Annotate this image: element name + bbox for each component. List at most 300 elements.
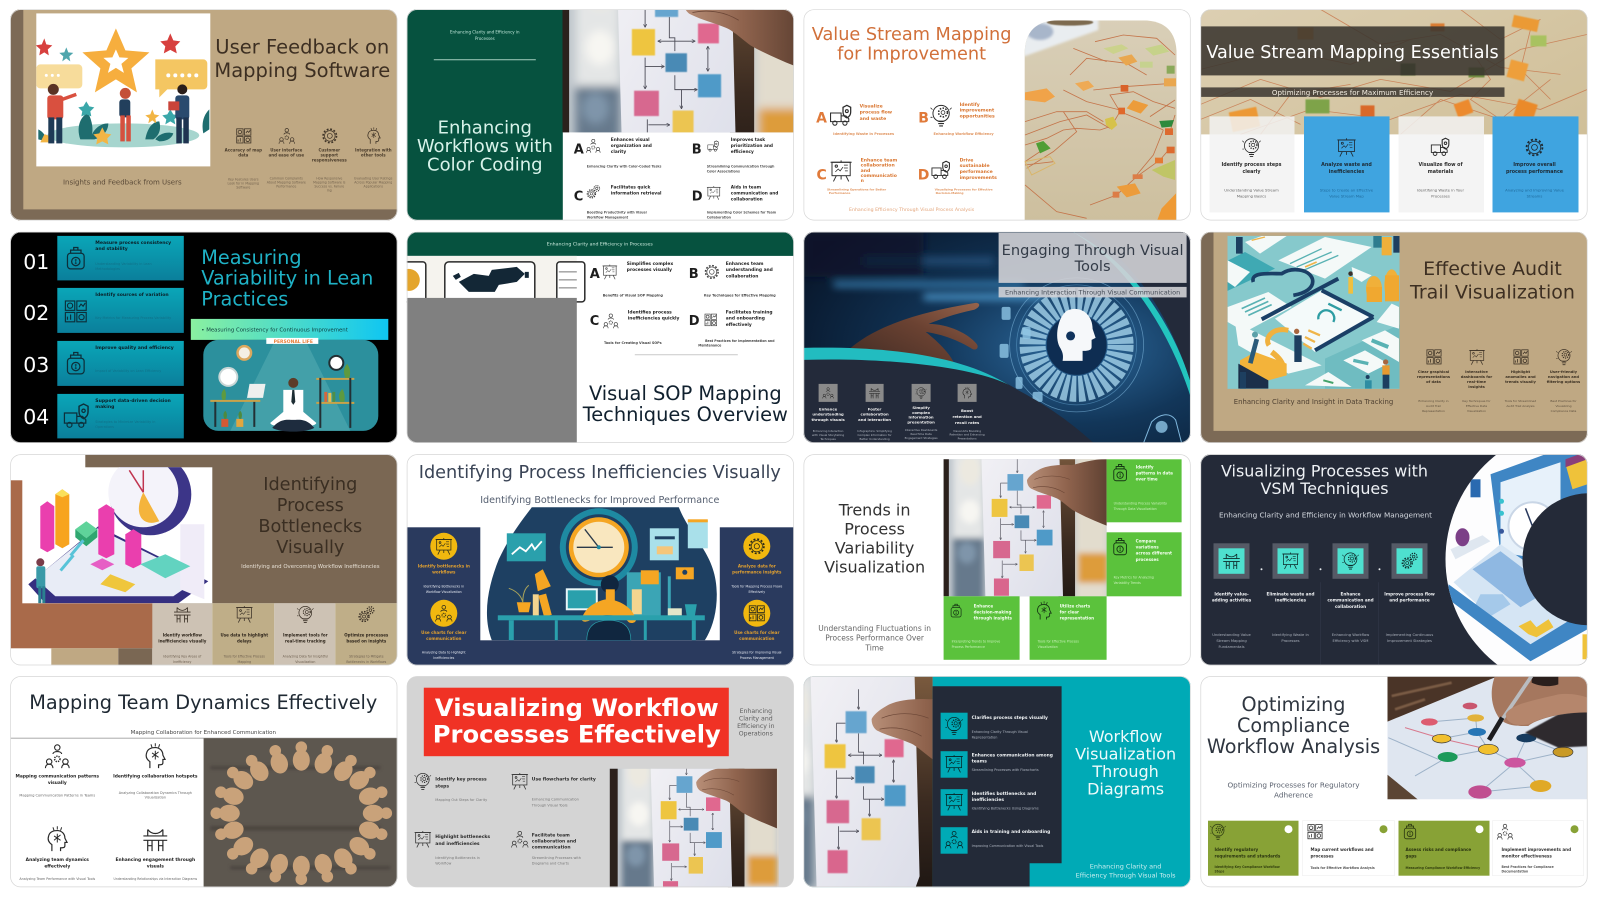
card 1	[1210, 116, 1294, 212]
item: team dynamics: Analyzing team dynamics	[26, 857, 89, 863]
title: Mapping Software	[214, 59, 390, 82]
item 3: Identifying Bottlenecks in	[435, 856, 480, 860]
subtitle: Understanding Fluctuations in	[818, 624, 931, 633]
column labels: Customer	[318, 147, 340, 152]
card 3: Identifying Waste in Your	[1417, 187, 1464, 192]
item A: Enhances visual	[611, 137, 650, 143]
item B: B	[692, 142, 702, 157]
item: team dynamics: Analyzing Team Performance with Visual Tools	[19, 877, 96, 881]
icon: cog	[1527, 139, 1542, 155]
card 1: clearly	[1242, 169, 1261, 175]
feature 3: Interactive Dashboards	[905, 428, 938, 432]
column labels: responsiveness	[312, 157, 347, 162]
title: Compliance	[1237, 714, 1350, 737]
item C: and	[861, 168, 870, 174]
item C: Tools for Creating Visual SOPs	[604, 341, 662, 345]
step card 4: Strategies to Minimize Variability in	[95, 420, 155, 424]
icon	[146, 743, 165, 768]
feature 4: Boost	[961, 408, 973, 413]
item C: Streamlining Operations for Better	[827, 187, 887, 191]
item 2: Enhancing Communication	[532, 798, 579, 802]
title: Techniques Overview	[582, 403, 788, 426]
column labels: Integration with	[355, 147, 392, 152]
list item 1: Enhancing Clarity Through Visual	[972, 730, 1028, 734]
title: Diagrams	[1087, 780, 1164, 799]
item C: Enhance team	[861, 157, 897, 163]
panel: Value Stream Mapping Essentials	[1200, 9, 1588, 220]
icon	[1223, 554, 1240, 569]
item C: C	[590, 314, 599, 329]
item 1: steps	[435, 784, 449, 790]
column labels: and ease of use	[269, 152, 304, 157]
panel: Mapping Team Dynamics Effectively	[10, 676, 398, 887]
step numbers: 04	[23, 405, 49, 429]
item: communication patterns: Mapping Communication Patterns in Teams	[19, 794, 95, 798]
item: analyze data: Tools for Mapping Process Flows	[730, 584, 783, 588]
title: Workflow Analysis	[1207, 735, 1380, 758]
item 1: Mapping Out Steps for Clarity	[435, 798, 487, 802]
item 4: collaboration and	[532, 839, 576, 845]
photo: wooden pegs in a circle	[204, 738, 398, 887]
list item 3: Identifying Bottlenecks Using Diagrams	[972, 807, 1039, 811]
icon	[1308, 825, 1322, 839]
column labels: Interactive	[1465, 370, 1488, 374]
column labels: trends visually	[1505, 380, 1536, 384]
column labels: navigation and	[1548, 375, 1579, 379]
item: analyze data	[730, 533, 783, 594]
subtitle: Optimizing Processes for Regulatory	[1227, 781, 1360, 790]
column descriptions: Compliance Data	[1551, 409, 1577, 413]
item 2	[512, 773, 596, 807]
list item 4	[941, 827, 1050, 854]
feature 1: through visuals	[811, 417, 845, 422]
column descriptions: Applications	[364, 184, 383, 188]
step numbers: 01	[23, 250, 49, 274]
list item 4: Aids in training and onboarding	[972, 829, 1050, 835]
card 4: Improve overall	[1513, 162, 1556, 168]
header band: Enhancing Clarity and Efficiency in Processes	[547, 241, 653, 247]
green card B: variations	[1136, 544, 1159, 549]
green card D: for clear	[1060, 609, 1079, 614]
item A: Benefits of Visual SOP Mapping	[603, 293, 663, 297]
title box: Tools	[1074, 258, 1111, 275]
item D	[689, 309, 775, 347]
card 3: Assess risks and compliance	[1406, 847, 1471, 852]
step card 3: Improve quality and efficiency	[95, 345, 174, 351]
item B: Key Techniques for Effective Mapping	[704, 293, 776, 297]
icon	[1282, 553, 1299, 569]
side caption: Clarity and	[739, 716, 773, 723]
column 3: Implement tools for	[283, 632, 328, 637]
column labels: Clear graphical	[1418, 370, 1449, 374]
icon: integration	[368, 127, 380, 144]
item 1: Identify key process	[435, 777, 487, 783]
column descriptions	[228, 176, 393, 192]
step 1	[1212, 543, 1252, 649]
column labels: real-time	[1467, 380, 1486, 384]
column 2: Tools for Effective Process	[223, 654, 265, 658]
column descriptions: How Responsive	[316, 176, 342, 180]
card 1: Mapping Basics	[1237, 193, 1266, 198]
item: use charts left: Inefficiencies	[433, 656, 455, 660]
photo: map header	[1200, 10, 1588, 134]
item 3: Highlight bottlenecks	[435, 834, 490, 840]
icon	[945, 755, 963, 772]
icon	[143, 829, 167, 851]
card 4: Streams	[1527, 193, 1542, 198]
item: engagement	[113, 829, 197, 881]
item A: clarity	[611, 149, 626, 155]
icon	[945, 831, 963, 848]
column 4	[335, 603, 397, 665]
title: for Improvement	[837, 44, 986, 64]
panel: Value Stream Mapping for Improvement	[804, 9, 1191, 222]
item: identify bottlenecks	[418, 533, 470, 594]
column 2	[212, 603, 274, 665]
step card 4	[57, 394, 184, 438]
supertitle: Enhancing Clarity and Efficiency in	[450, 29, 520, 34]
panel: Visualizing Workflow Processes Effectively	[407, 676, 794, 900]
item B: Enhances team	[726, 261, 764, 267]
subtitle band: Optimizing Processes for Maximum Efficiency	[1272, 88, 1433, 97]
item: identify bottlenecks: Workflow Visualization	[426, 590, 462, 594]
column labels: insights	[1468, 385, 1486, 389]
item B: B	[918, 110, 929, 126]
item: use charts right: Use charts for clear	[734, 630, 779, 635]
item: identify bottlenecks: workflows	[432, 569, 456, 574]
list item 2: Streamlining Processes with Flowcharts	[972, 768, 1039, 772]
card 4: monitor effectiveness	[1502, 854, 1552, 859]
item A: processes visually	[627, 267, 672, 273]
step 2: inefficiencies	[1275, 598, 1306, 603]
icon	[415, 831, 431, 847]
panel: Engaging Through Visual Tools	[804, 232, 1191, 443]
title: Workflows with	[417, 136, 553, 157]
item: use charts left	[421, 600, 466, 660]
header band	[407, 232, 794, 256]
item: team dynamics: effectively	[44, 864, 70, 870]
item A: A	[574, 142, 584, 157]
illustration: meditating professional: PERSONAL LIFE	[274, 339, 313, 345]
column 4: based on insights	[346, 639, 387, 644]
column descriptions: Audit Trail	[1426, 404, 1441, 408]
item 4: communication	[532, 844, 571, 850]
card 1: Steps	[1214, 870, 1225, 874]
item: engagement: Enhancing engagement through	[115, 857, 195, 863]
subtitle: Time	[864, 643, 884, 652]
item: analyze data: performance insights	[732, 569, 782, 574]
supertitle: Processes	[475, 36, 495, 41]
title box: Engaging Through Visual	[1002, 242, 1184, 259]
item D	[692, 184, 778, 219]
item D: Visualizing Processes for Effective	[935, 187, 993, 191]
column labels: anomalies and	[1505, 375, 1536, 379]
title: Visually	[276, 538, 344, 558]
left side panel	[407, 527, 480, 665]
title: Enhancing	[438, 117, 532, 138]
item: collaboration hotspots: Visualization	[145, 796, 166, 800]
column 1: inefficiencies visually	[158, 639, 207, 644]
subtitle: Process Performance Over	[825, 634, 925, 643]
title: Value Stream Mapping	[812, 25, 1011, 45]
lower wave with teal edge	[804, 348, 1094, 443]
subtitle: Enhancing Clarity and	[1090, 863, 1161, 871]
icon	[1114, 538, 1126, 555]
green card B: processes	[1136, 557, 1159, 562]
green card C: Process Performance	[952, 645, 985, 649]
item 3: Workflow	[435, 862, 452, 866]
item 4: Facilitate team	[532, 833, 570, 839]
item A	[590, 261, 673, 297]
feature 4: retention and	[952, 414, 982, 419]
item D: Decision-Making	[936, 191, 964, 195]
item: use charts right: Process Management	[740, 656, 775, 660]
item D: communication and	[731, 190, 778, 196]
photo: flowchart on paper	[944, 459, 1107, 596]
step card 2: Identify sources of variation	[95, 292, 169, 298]
card 2	[1302, 821, 1394, 876]
icon	[945, 717, 963, 734]
item: engagement: visuals	[147, 864, 164, 870]
step card 1	[57, 236, 184, 280]
item D: Collaboration	[707, 215, 732, 219]
subtitle band: • Measuring Consistency for Continuous Improvement	[201, 327, 348, 333]
column descriptions: Visualizing	[1555, 404, 1572, 408]
icon	[48, 826, 67, 851]
item A: A	[816, 110, 827, 126]
column 1	[152, 603, 212, 665]
item B: Streamlining Communication through	[707, 164, 775, 168]
step 3: communication and	[1327, 598, 1374, 603]
list item 3: Identifies bottlenecks and	[972, 791, 1036, 797]
step numbers	[23, 250, 49, 429]
subtitle: Mapping Collaboration for Enhanced Communication	[131, 730, 276, 736]
column 3: Analyzing Data for Insightful	[283, 654, 328, 658]
item B: Color Associations	[707, 169, 740, 173]
feature 2: Infographics: Simplifying	[857, 429, 892, 433]
item 4: Diagrams and Charts	[532, 862, 569, 866]
green card D: Utilize charts	[1060, 603, 1091, 608]
item D: Aids in team	[731, 184, 762, 190]
title: Color Coding	[427, 154, 543, 175]
feature 1: with Visual Storytelling	[812, 433, 844, 437]
item D: performance	[960, 169, 993, 175]
green card A: Through Data Visualization	[1113, 507, 1157, 511]
column descriptions: Common Complaints	[270, 176, 303, 180]
column descriptions: Best Practices for	[1550, 399, 1577, 403]
feature 2	[857, 384, 892, 441]
illustration: laptop and clock in circle	[1446, 426, 1600, 692]
panel: Identifying Process Bottlenecks Visually	[10, 453, 397, 665]
feature 4	[949, 384, 985, 440]
column 2: Mapping	[237, 660, 251, 664]
feature 2: Foster	[868, 406, 882, 411]
column descriptions: Enhancing Clarity in	[1418, 399, 1449, 403]
item C: information retrieval	[611, 190, 662, 196]
icon: truck	[64, 404, 88, 427]
card 3: materials	[1428, 169, 1453, 175]
subtitle band	[191, 319, 388, 340]
column descriptions: Across Popular Mapping	[354, 180, 392, 184]
feature 1	[811, 384, 845, 441]
step 1: Identify value-	[1214, 591, 1249, 596]
item A: Simplifies complex	[627, 261, 673, 267]
card 2: Analyze waste and	[1321, 162, 1372, 168]
grey placeholder block	[407, 298, 577, 443]
card 4: Documentation	[1502, 870, 1528, 874]
icon	[963, 387, 972, 398]
title: Identifying Process Inefficiencies Visually	[419, 463, 781, 483]
list item 2: Enhances communication among	[972, 753, 1053, 759]
item C: Facilitates quick	[611, 184, 650, 190]
icon	[415, 773, 431, 789]
item D: D	[692, 189, 703, 204]
column descriptions: Success vs. Failure	[314, 184, 344, 188]
step 1: Stream Mapping	[1216, 639, 1247, 643]
card 3: gaps	[1406, 854, 1417, 859]
icon	[45, 745, 69, 768]
icon: grid jar	[65, 301, 86, 322]
card 3	[1398, 821, 1490, 876]
subtitle box: Enhancing Interaction Through Visual Communication	[1005, 289, 1180, 297]
feature 3	[905, 384, 938, 440]
step 2: Eliminate waste and	[1267, 591, 1314, 596]
step 4: Improvement Strategies	[1387, 639, 1432, 643]
item: analyze data: Analyze data for	[738, 563, 776, 568]
title: Visual SOP Mapping	[589, 382, 782, 405]
step numbers: 03	[23, 353, 49, 377]
feature 3: Real-Time Data	[910, 432, 932, 436]
feature columns	[225, 127, 393, 192]
icon D	[705, 314, 717, 326]
step 2	[1267, 543, 1314, 643]
step card 3: Impact of Variability on Lean Efficiency	[95, 369, 161, 373]
green card C	[944, 596, 1020, 660]
photo: flowchart on paper	[562, 9, 794, 132]
icon	[951, 604, 961, 617]
icon	[512, 831, 528, 847]
green card C: Interpreting Trends to Improve	[952, 639, 1000, 643]
icon: map accuracy	[237, 129, 251, 143]
card 1: Identify process steps	[1222, 162, 1282, 168]
item: use charts left: communication	[426, 636, 462, 641]
icon	[174, 608, 191, 623]
green card C: Enhance	[974, 603, 993, 608]
item D: Drive	[960, 157, 973, 163]
green card D: Visualization	[1038, 645, 1058, 649]
column labels: other tools	[361, 152, 386, 157]
icon A	[586, 139, 600, 153]
item: collaboration hotspots: Analyzing Collaboration Dynamics Through	[119, 791, 192, 795]
icon B	[708, 141, 718, 151]
column 1: Inefficiency	[173, 660, 192, 664]
column descriptions: Tools for Streamlined	[1504, 399, 1536, 403]
step 1: Fundamentals	[1218, 645, 1245, 649]
item C: inefficiencies quickly	[628, 316, 680, 322]
icon	[1402, 553, 1417, 568]
feature 3: information	[909, 415, 934, 420]
card 2: Tools for Effective Workflow Analysis	[1310, 866, 1375, 870]
card 1	[1208, 821, 1298, 876]
photo: flowchart on paper	[610, 768, 779, 888]
icon	[749, 606, 764, 621]
title: Measuring	[201, 246, 302, 269]
title: Variability in Lean	[201, 267, 373, 290]
step 4	[1384, 543, 1435, 643]
side caption: Efficiency in	[737, 723, 775, 730]
card 3: Visualize flow of	[1418, 162, 1463, 168]
icon	[916, 388, 927, 398]
step card 2	[57, 288, 184, 333]
icon	[1404, 824, 1416, 839]
item A	[816, 103, 894, 136]
item D: Best Practices for Implementation and	[705, 339, 775, 343]
step card 4: making	[95, 404, 114, 410]
column descriptions: Representation	[1422, 409, 1445, 413]
feature 1: Techniques	[819, 437, 836, 441]
icon	[1037, 601, 1051, 620]
title: VSM Techniques	[1260, 479, 1389, 498]
icon	[750, 539, 764, 553]
column labels: dashboards for	[1461, 375, 1492, 379]
title: Variability	[835, 538, 914, 557]
card 2: processes	[1310, 854, 1334, 859]
step card 1: Understanding Variability in Lean	[95, 262, 152, 266]
title: Visualization	[1075, 745, 1176, 764]
item 4: Streamlining Processes with	[532, 856, 581, 860]
photo: hand touching digital head	[804, 232, 1191, 443]
item D: Maintenance	[698, 343, 721, 347]
green card B: Variability Trends	[1114, 581, 1141, 585]
title: Visualization	[824, 557, 925, 576]
panel: Visualizing Processes with VSM Techniques	[1200, 426, 1600, 692]
feature 2: Complex Information for	[858, 433, 892, 437]
panel: Enhancing Workflows with Color Coding	[407, 0, 802, 220]
column labels: Highlight	[1511, 370, 1530, 374]
card 4: Implement improvements and	[1502, 847, 1571, 852]
icon: support	[323, 129, 337, 143]
column 4: Optimize processes	[344, 632, 389, 637]
step card 1: Measure process consistency	[95, 240, 171, 246]
icon C	[603, 314, 618, 328]
card 4: Analyzing and Improving Value	[1505, 187, 1565, 192]
title: Workflow	[1089, 727, 1162, 746]
item C: collaboration	[861, 163, 895, 169]
item B: B	[689, 267, 699, 282]
panel: Trends in Process Variability Visualization	[804, 448, 1191, 665]
item D: improvements	[960, 175, 997, 181]
icon	[1497, 824, 1513, 839]
item: team dynamics	[19, 826, 96, 881]
title: Optimizing	[1242, 693, 1345, 716]
column 2: Use data to highlight	[220, 632, 268, 637]
step 2: Processes	[1281, 639, 1300, 643]
icon B: bulb gear	[931, 105, 952, 126]
item D	[918, 157, 997, 195]
icon: board	[1337, 138, 1356, 157]
feature 1: understanding	[812, 412, 844, 417]
step 1: Understanding Value	[1212, 633, 1251, 637]
step 4: Improve process flow	[1384, 591, 1435, 596]
panel: User Feedback on Mapping Software	[10, 9, 397, 220]
dark corner right of the swoosh	[1085, 232, 1191, 382]
feature columns	[1417, 349, 1581, 413]
item: communication patterns: Mapping communication patterns	[16, 774, 99, 780]
step 4: and performance	[1389, 598, 1430, 603]
icon A	[602, 265, 617, 279]
icon A: truck	[831, 105, 851, 125]
item 3: and inefficiencies	[435, 841, 480, 847]
